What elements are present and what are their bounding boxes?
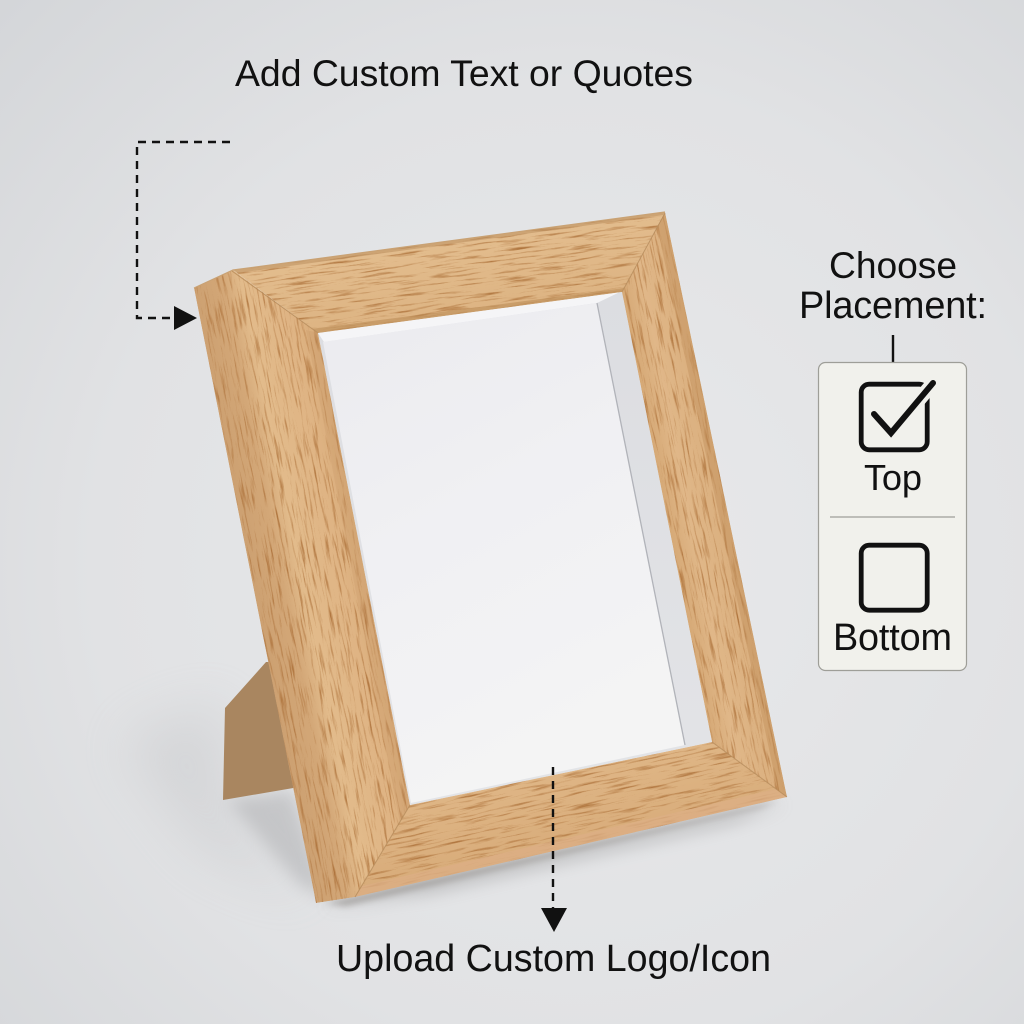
top rail (234, 212, 664, 333)
heading: choose placement: Choose (829, 244, 957, 286)
placement connector line (892, 335, 894, 363)
paper panel (323, 303, 685, 803)
placement panel (818, 362, 966, 670)
dashed connector: logo (541, 767, 567, 932)
easel stand (223, 662, 305, 800)
bottom rail (356, 742, 786, 897)
right rail (622, 212, 787, 797)
dashed connector: custom text (137, 142, 230, 330)
mat top band (318, 291, 622, 342)
outer edge highlight (194, 212, 665, 288)
picture frame (194, 211, 788, 903)
icon: checked box (861, 382, 934, 450)
label: bottom: Bottom (833, 617, 952, 659)
frame shadow (120, 700, 787, 908)
heading: logo upload: Upload Custom Logo/Icon (336, 937, 771, 979)
heading: custom text: Add Custom Text or Quotes (235, 52, 693, 94)
icon: empty box (861, 545, 927, 610)
inner mat (318, 291, 712, 805)
miters (232, 213, 787, 897)
heading: choose placement (799, 244, 987, 327)
heading: choose placement: Placement: (799, 285, 987, 327)
paper edge shadow (597, 303, 685, 745)
label: top: Top (864, 457, 922, 498)
left rail (194, 270, 410, 903)
